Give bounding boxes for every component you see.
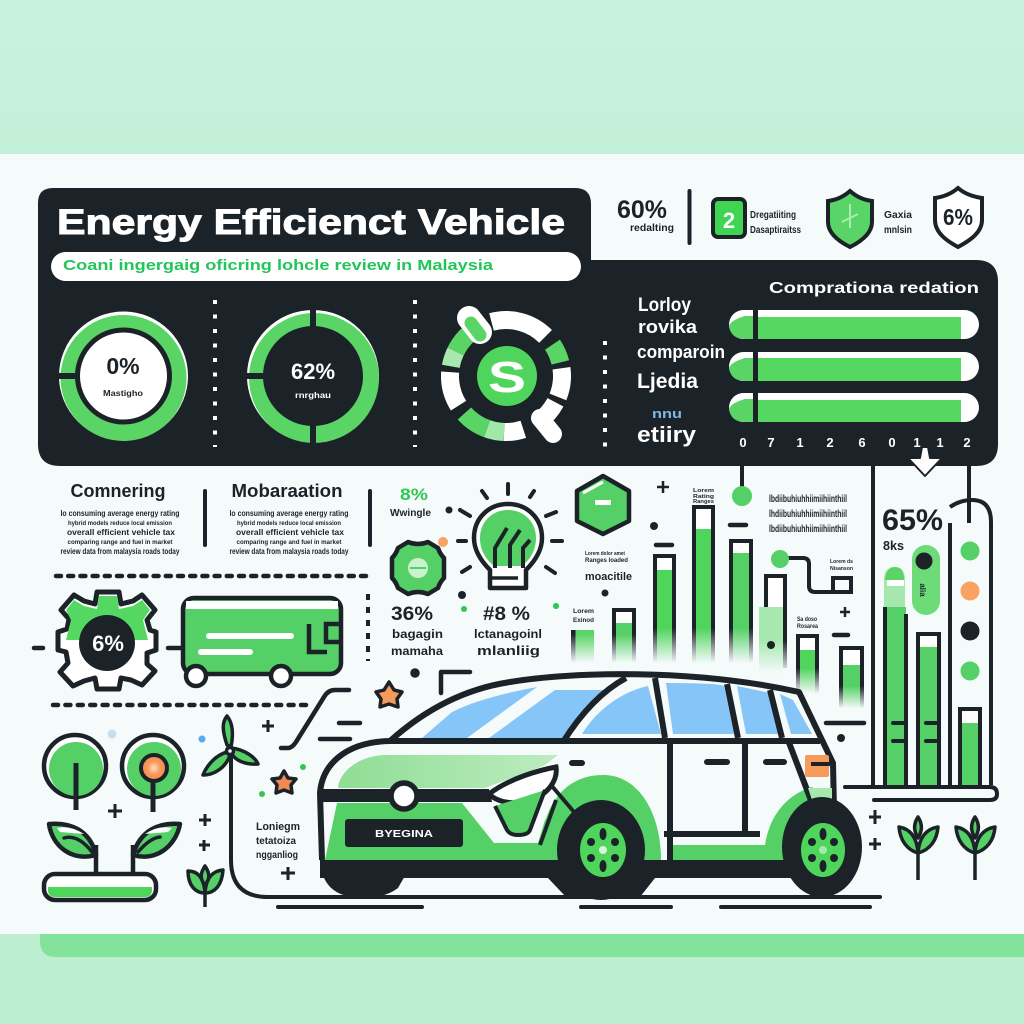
icon: green tree circle [44, 735, 106, 810]
text block: Mobaraation: comparing range and fuel in market [236, 540, 342, 546]
icon: gear 6% [58, 592, 156, 689]
subtitle pill [51, 252, 581, 281]
car sill [670, 845, 770, 861]
stat: 36%: bagagin [392, 627, 443, 641]
text: Loniegm [256, 821, 300, 861]
stat: 8%: 8% [400, 485, 428, 504]
car fender lines [540, 785, 574, 845]
stat: 36% [391, 604, 443, 658]
divider [203, 489, 207, 547]
text block: Comnering: Comnering [70, 481, 166, 501]
car dark lower band [320, 860, 850, 878]
top stat text: Dregatiiting [750, 210, 796, 221]
car body [320, 674, 834, 860]
top shield text: Gaxia [884, 210, 912, 221]
bar chart small labels: Lorem [693, 488, 715, 494]
background: top mint band [0, 0, 1024, 154]
panel: dark header dashboard [38, 188, 998, 466]
stat: 65%: 65% [882, 504, 943, 537]
donut: 0% [58, 312, 188, 441]
comparison title: Comprationa redation [769, 280, 979, 297]
car rear arch [764, 787, 832, 860]
stat: 65% [882, 504, 943, 553]
text block: Mobaraation [230, 481, 349, 556]
text: Loniegm: Loniegm [256, 821, 300, 833]
divider [368, 489, 372, 547]
comparison axis numbers: 2 [826, 435, 834, 450]
comparison row labels: nnu [652, 406, 682, 421]
car lower green [325, 800, 570, 860]
top stat text: Dasaptiraitss [750, 225, 801, 236]
icon: green badge gear [392, 542, 444, 594]
stat: 36%: mamaha [391, 644, 443, 658]
comparison bars [729, 308, 979, 424]
subtitle pill: Coani ingergaig oficring lohcle review in Malaysia [63, 257, 494, 274]
stat: 65%: 8ks [883, 538, 904, 553]
car front arch [540, 775, 661, 860]
icon: star small [272, 771, 296, 793]
dashed rule [56, 574, 367, 578]
top stat text [750, 210, 801, 236]
licence plate: BYEGINA [375, 829, 433, 840]
text block: Comnering: review data from malaysia roads today [60, 547, 180, 556]
icon: green shield [828, 191, 872, 247]
stat: #8% [474, 604, 542, 658]
icon: percent shield [935, 188, 982, 247]
decorative plus signs and dots [108, 720, 881, 880]
stat: #8%: mlanliig [477, 643, 540, 658]
car grille band [322, 789, 492, 802]
comparison axis numbers: 1 [796, 435, 804, 450]
icon: green hexagon [577, 476, 629, 534]
comparison axis numbers: 0 [888, 435, 896, 450]
top shield text [884, 210, 912, 236]
licence plate [345, 819, 463, 847]
comparison row labels [637, 295, 725, 447]
top stat: 60%: 60% [617, 196, 667, 224]
stat: 36%: 36% [391, 604, 433, 625]
bar chart small labels: Rating [693, 494, 714, 500]
stat: 8%: Wwingle [390, 508, 431, 519]
top shield text: mnlsin [884, 225, 912, 236]
bar chart small labels: Exinod [573, 618, 594, 624]
text lines: upper right block: lbdiibuhiuhhiimiihiinthiil [769, 524, 847, 535]
car windshield [422, 687, 607, 738]
label: hexagon caption [585, 551, 632, 583]
icon: green truck [183, 598, 341, 686]
icon: small sprout [188, 866, 223, 907]
icon: green square badge: 2 [723, 208, 735, 233]
top divider [688, 189, 692, 245]
ground lines [231, 757, 880, 907]
icon: sprout and planter [44, 824, 180, 900]
gauge: S segmented ring: S [488, 353, 526, 402]
dashed rule vertical [366, 594, 370, 661]
illustration: car [320, 674, 862, 900]
icon: green square badge [713, 199, 745, 237]
text block: Mobaraation: overall efficient vehicle tax [236, 528, 345, 537]
text block: Mobaraation: Mobaraation [232, 481, 342, 501]
stat: #8%: #8 % [483, 604, 530, 625]
decorative dots near bulb [438, 506, 559, 612]
rear wheel [782, 797, 862, 897]
stat: #8%: lctanagoinl [474, 627, 542, 641]
icon: star [376, 682, 402, 707]
bar chart small labels [573, 488, 853, 630]
comparison axis numbers: 7 [767, 435, 775, 450]
icon: percent shield: 6% [943, 204, 973, 230]
title: Energy Efficienct Vehicle [57, 203, 565, 242]
icon: right plant two [956, 817, 995, 880]
bar chart small labels: Nisanson [830, 566, 853, 572]
icon: wind turbine [203, 716, 258, 775]
connector lines and dots [553, 466, 969, 785]
top stat: 60%: redalting [630, 223, 674, 234]
donut: 62%: 62% [291, 359, 335, 384]
car hood tint [338, 755, 558, 788]
comparison row labels: Lorloy [638, 295, 691, 316]
comparison row labels: comparoin [637, 342, 725, 362]
dash connectors [34, 646, 183, 650]
comparison row labels: Ljedia [637, 370, 698, 393]
dashed rule lower [53, 703, 310, 707]
bar chart small labels: Rosarea [797, 624, 819, 630]
text lines: upper right block [769, 494, 847, 535]
car headlamp [489, 767, 556, 803]
text lines: upper right block: lhdiibuhiuhhiimiihiinthiil [769, 509, 847, 520]
text block: Mobaraation: hybrid models reduce local emission [237, 521, 341, 527]
icon: orange tree circle [122, 735, 184, 812]
comparison axis numbers: 0 [739, 435, 747, 450]
bar chart small labels: Lorem ds [830, 559, 853, 565]
background: central page [0, 154, 1024, 934]
comparison row labels: rovika [638, 317, 698, 337]
bar chart: vertical green bars [568, 507, 866, 714]
icon: gear 6%: 6% [92, 631, 124, 656]
arrow: down pointer [908, 447, 942, 476]
top stat: 60% [617, 196, 674, 234]
front wheel [548, 800, 655, 900]
text block: Comnering: overall efficient vehicle tax [67, 528, 176, 537]
bar chart small labels: Sa doso [797, 617, 817, 623]
label: hexagon caption: moacitile [585, 571, 632, 583]
comparison axis numbers [739, 435, 971, 450]
car lamp wedge [495, 790, 545, 835]
donut: 0%: Mastigho [103, 389, 143, 398]
gauge: S segmented ring [428, 298, 584, 454]
dotted separators [215, 300, 605, 447]
comparison axis numbers: 2 [963, 435, 971, 450]
bar chart: right tall [845, 466, 997, 800]
text: Loniegm: tetatoiza [256, 836, 296, 847]
car side windows [582, 683, 812, 734]
text block: Comnering: hybrid models reduce local emission [68, 521, 172, 527]
car door handles [572, 762, 784, 763]
capsule indicator [912, 545, 940, 615]
comparison row labels: etiiry [637, 422, 697, 447]
text block: Comnering [60, 481, 180, 556]
decor lines around car [281, 670, 470, 748]
comparison axis numbers: 1 [913, 435, 921, 450]
comparison axis numbers: 1 [936, 435, 944, 450]
capsule indicator: alia [918, 583, 927, 597]
background: bottom mint band [0, 934, 1024, 1024]
label: hexagon caption: Lorem dolor amet [585, 551, 625, 557]
donut: 62%: rnrghau [295, 391, 331, 400]
car bumper left [320, 860, 414, 897]
icon: right plant one [899, 817, 938, 880]
donut: 62% [245, 305, 379, 450]
text: Loniegm: ngganliog [256, 850, 298, 861]
car outline [320, 674, 834, 860]
car tail light [805, 755, 832, 804]
comparison axis numbers: 6 [858, 435, 866, 450]
icon: light bulb [458, 484, 562, 588]
text block: Mobaraation: lo consuming average energy rating [230, 509, 349, 518]
text lines: upper right block: lbdiibuhiuhhiimiihiinthiil [769, 494, 847, 505]
car headlight ring [391, 783, 417, 809]
donut: 0%: 0% [106, 353, 140, 379]
text block: Comnering: lo consuming average energy rating [60, 509, 180, 518]
text block: Mobaraation: review data from malaysia roads today [230, 547, 349, 556]
stat: 8% [390, 485, 431, 519]
label: hexagon caption: Ranges loaded [585, 558, 628, 564]
text block: Comnering: comparing range and fuel in market [68, 540, 172, 546]
bar chart small labels: Lorem [573, 609, 594, 615]
bar chart small labels: Ranges [693, 499, 714, 505]
